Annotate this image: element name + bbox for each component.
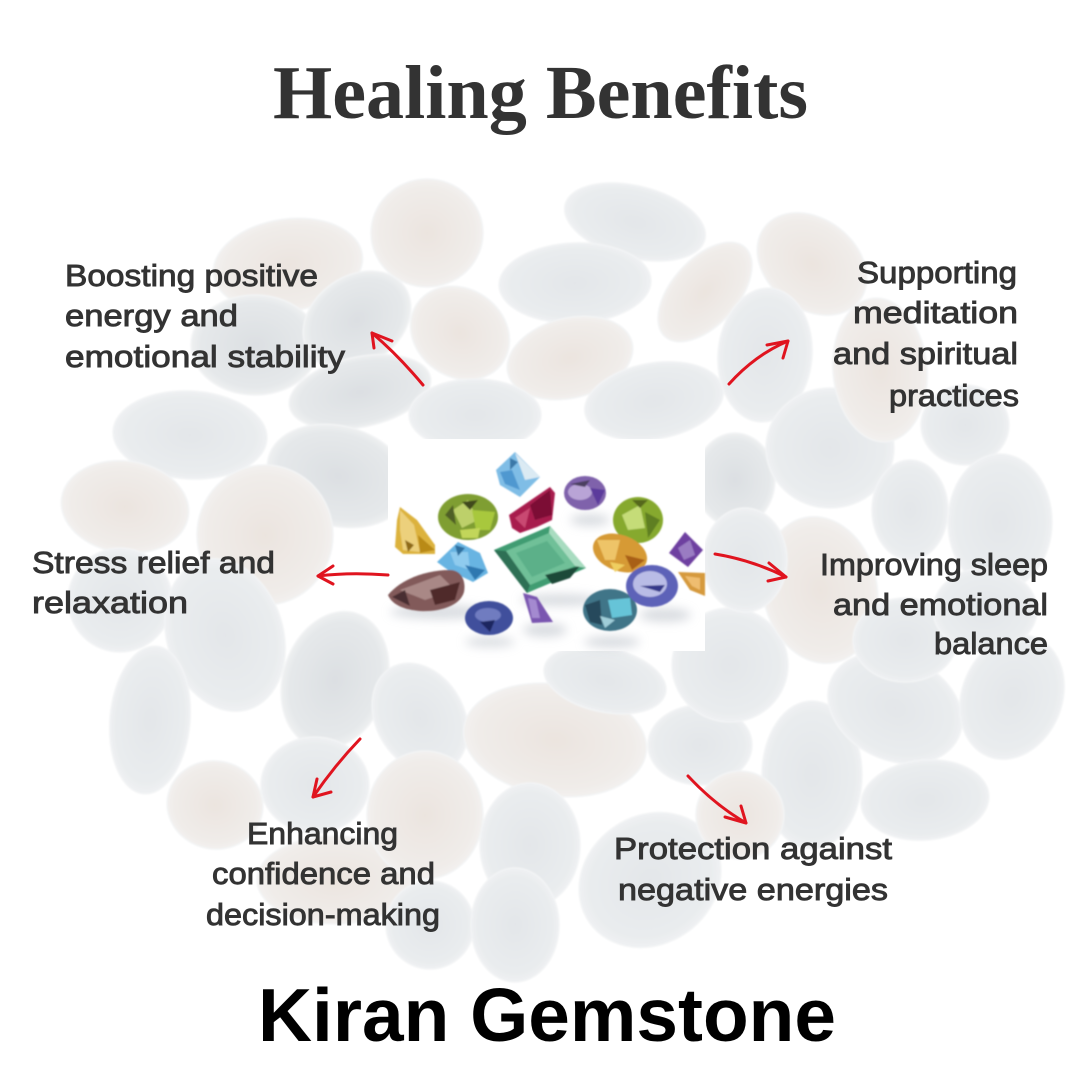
callout: boosting positive energy: energy and [65, 298, 238, 333]
purple square gem [669, 532, 703, 567]
callout: supporting meditation: practices [889, 378, 1019, 413]
callout: stress relief: Stress relief and [32, 545, 275, 580]
arrow: to stress relief [318, 566, 388, 584]
callout: supporting meditation: meditation [853, 295, 1018, 330]
green oval gem [438, 494, 498, 540]
arrow: to protection [688, 776, 746, 823]
callout: supporting meditation [833, 255, 1019, 413]
ruby gem [509, 487, 555, 533]
callout: boosting positive energy: emotional stability [65, 339, 346, 374]
faded gemstone background pattern [55, 170, 1080, 982]
callout: improving sleep: Improving sleep [820, 547, 1048, 582]
peridot oval gem [613, 497, 663, 543]
emerald cut gem [494, 526, 586, 593]
callout: enhancing confidence: confidence and [212, 856, 435, 891]
callout: supporting meditation: Supporting [857, 255, 1017, 290]
footer title: Kiran Gemstone [258, 973, 836, 1057]
callout: stress relief [32, 545, 275, 620]
callout: enhancing confidence [206, 816, 440, 932]
callout: boosting positive energy [65, 258, 346, 374]
periwinkle oval gem [626, 565, 678, 607]
blue trillion gem [437, 542, 488, 582]
arrow: to boosting positive energy [372, 333, 423, 385]
callout: enhancing confidence: decision-making [206, 897, 440, 932]
teal oval gem [583, 589, 637, 631]
citrine gem [588, 527, 652, 579]
arrow: to supporting meditation [729, 341, 788, 384]
title: Healing Benefits [273, 51, 808, 135]
callout: enhancing confidence: Enhancing [247, 816, 398, 851]
yellow pear gem [395, 507, 435, 554]
small amethyst trillion gem [523, 593, 553, 623]
callout: improving sleep: and emotional [833, 587, 1048, 622]
amber partial gem [678, 572, 705, 596]
callout: supporting meditation: and spiritual [833, 336, 1018, 371]
callout: protection: Protection against [614, 831, 892, 866]
callout: stress relief: relaxation [32, 585, 188, 620]
rose pear gem [388, 570, 464, 611]
callout: boosting positive energy: Boosting positive [65, 258, 318, 293]
tanzanite oval gem [465, 601, 513, 635]
callout: protection [614, 831, 892, 907]
light blue cushion gem [496, 452, 540, 497]
callout: improving sleep [820, 547, 1048, 661]
central gemstone photo [388, 439, 705, 651]
arrow: to improving sleep [715, 554, 786, 581]
amethyst oval gem [564, 476, 606, 510]
arrow: to enhancing confidence [313, 739, 360, 797]
callout: protection: negative energies [618, 872, 888, 907]
callout: improving sleep: balance [934, 626, 1048, 661]
